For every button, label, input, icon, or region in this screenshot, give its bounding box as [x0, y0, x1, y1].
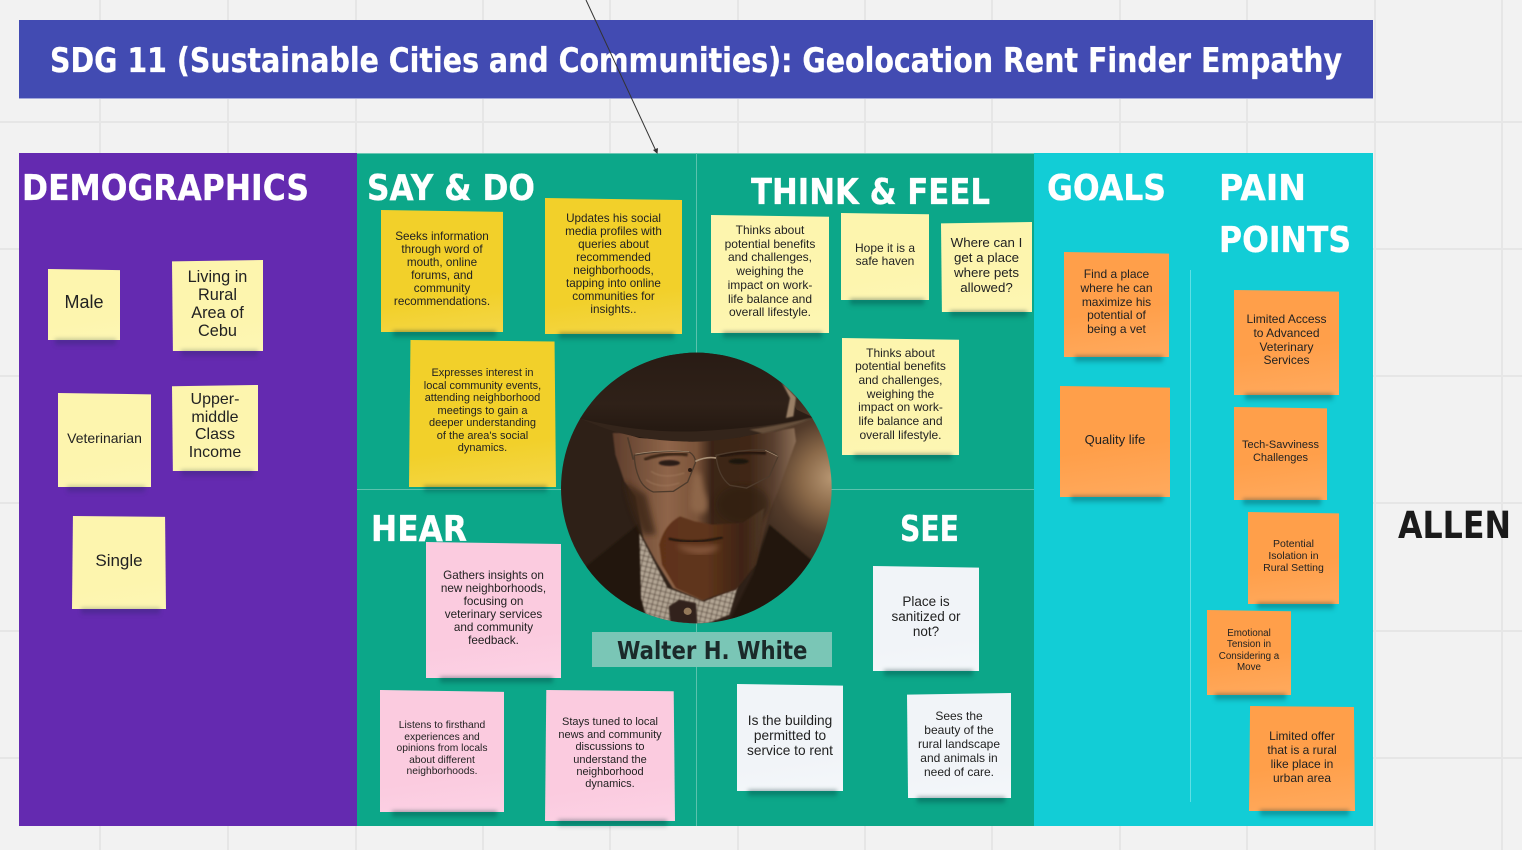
note: benefits and challenges one	[711, 215, 829, 333]
note: sanitized: Place is	[902, 594, 950, 609]
heading: pain points	[1219, 168, 1351, 261]
note: benefits and challenges two: impact on work-	[858, 400, 943, 414]
heading: goals: GOALS	[1047, 168, 1166, 209]
note: living in rural area: Living in	[188, 268, 247, 286]
note: sanitized: not?	[913, 624, 939, 639]
note: benefits and challenges one: weighing the	[736, 264, 804, 278]
note: find a place: where he can	[1080, 281, 1153, 295]
tie knot	[669, 600, 698, 628]
note: local news: understand the	[573, 754, 647, 766]
note: listens: neighborhoods.	[406, 766, 478, 777]
note: pets allowed: where pets	[954, 265, 1019, 280]
note: benefits and challenges two: potential benefits	[855, 359, 946, 373]
panel: goals and pain points	[1034, 153, 1373, 826]
panel: empathy quadrants	[357, 153, 1034, 826]
note: building permit	[737, 684, 843, 791]
note: benefits and challenges two: life balance and	[858, 414, 943, 428]
note: income class: Class	[195, 426, 235, 443]
note: quality life: Quality life	[1085, 432, 1145, 447]
nose	[690, 473, 707, 513]
note: community events: attending neighborhood	[425, 392, 540, 404]
note: living in rural area: Rural	[198, 286, 237, 304]
note: seeks information: forums, and	[411, 269, 473, 282]
note: living in rural area: Cebu	[198, 322, 237, 340]
note: seeks information: Seeks information	[395, 230, 489, 243]
note: isolation: Isolation in	[1268, 550, 1319, 562]
note: emotional tension	[1207, 610, 1291, 695]
note: income class: Income	[189, 444, 241, 460]
glasses	[634, 450, 778, 492]
note: benefits and challenges two	[842, 338, 959, 455]
note: tech savviness: Tech-Savviness	[1242, 438, 1319, 450]
note: find a place: being a vet	[1087, 322, 1146, 336]
note: single: Single	[95, 550, 143, 570]
note: veterinary access: to Advanced	[1253, 326, 1320, 340]
note: community events: meetings to gain a	[438, 405, 527, 417]
note: updates profiles: Updates his social	[566, 212, 661, 225]
note: sanitized	[873, 566, 979, 671]
note: emotional tension: Emotional	[1227, 628, 1271, 638]
note: rural beauty: Sees the	[935, 708, 983, 722]
note: updates profiles: queries about	[578, 238, 649, 251]
note: income class: middle	[191, 408, 239, 426]
note: find a place: potential of	[1087, 308, 1146, 322]
note: updates profiles: tapping into online	[566, 277, 661, 290]
note: pets allowed: Where can I	[951, 235, 1022, 250]
title banner background	[19, 20, 1373, 98]
note: benefits and challenges one: impact on work-	[728, 278, 812, 292]
note: seeks information: community	[414, 282, 470, 295]
note: benefits and challenges two: Thinks about	[866, 346, 935, 360]
note: benefits and challenges one: potential benefits	[725, 237, 815, 251]
note: seeks information: recommendations.	[394, 295, 490, 308]
note: updates profiles	[545, 198, 682, 334]
note: living in rural area	[172, 260, 263, 351]
note: isolation: Potential	[1273, 538, 1314, 550]
note: benefits and challenges two: overall lifestyle.	[859, 428, 942, 442]
note: gathers insights: Gathers insights on	[443, 569, 544, 582]
note: updates profiles: media profiles with	[565, 225, 662, 238]
note: pets allowed	[941, 222, 1032, 312]
note: rural beauty: rural landscape	[918, 736, 1000, 750]
note: gathers insights: and community	[454, 621, 533, 634]
note: income class	[172, 385, 258, 471]
panel: demographics	[19, 153, 357, 826]
note: rural beauty: and animals in	[920, 750, 998, 764]
heading: pain points: PAIN	[1219, 168, 1306, 209]
note: limited offer: like place in	[1271, 756, 1333, 770]
note: gathers insights: focusing on	[464, 595, 523, 608]
note: seeks information: mouth, online	[407, 256, 477, 269]
note: rural beauty	[907, 693, 1011, 798]
note: emotional tension: Tension in	[1227, 639, 1271, 650]
arrow	[586, 0, 658, 154]
note: isolation: Rural Setting	[1263, 562, 1324, 574]
note: sanitized: sanitized or	[891, 609, 961, 624]
note: community events: local community events,	[424, 380, 541, 392]
name label: Walter H. White	[617, 636, 807, 665]
note: local news: news and community	[558, 729, 662, 741]
hat	[580, 348, 813, 442]
portrait photo	[561, 352, 832, 624]
note: updates profiles: communities for	[572, 290, 655, 303]
note: local news: dynamics.	[585, 778, 635, 790]
note: local news	[545, 690, 675, 821]
note: veterinary access: Limited Access	[1246, 312, 1327, 326]
note: building permit: service to rent	[747, 743, 833, 758]
note: limited offer: Limited offer	[1269, 728, 1335, 742]
note: safe haven	[841, 213, 929, 300]
note: community events: dynamics.	[458, 442, 507, 454]
note: find a place	[1064, 252, 1169, 357]
note: limited offer: urban area	[1273, 770, 1331, 784]
heading: pain points: POINTS	[1219, 220, 1351, 261]
note: safe haven: safe haven	[856, 254, 914, 268]
coat	[586, 524, 812, 619]
note: building permit: permitted to	[754, 728, 826, 743]
note: seeks information: through word of	[401, 243, 483, 256]
note: benefits and challenges two: weighing the	[867, 387, 934, 401]
note: listens	[380, 690, 504, 812]
note: rural beauty: beauty of the	[924, 722, 994, 736]
heading: see: SEE	[900, 509, 959, 550]
note: community events: deeper understanding	[429, 417, 536, 429]
name label	[592, 632, 832, 667]
note: local news: neighborhood	[576, 766, 644, 778]
note: community events: Expresses interest in	[431, 367, 534, 379]
note: building permit: Is the building	[748, 713, 832, 728]
note: benefits and challenges one: Thinks about	[736, 223, 804, 237]
note: benefits and challenges one: life balance and	[728, 292, 812, 306]
note: listens: about different	[409, 755, 475, 766]
note: gathers insights: veterinary services	[445, 608, 542, 621]
note: limited offer	[1249, 706, 1355, 811]
note: benefits and challenges one: overall lifestyle.	[729, 305, 811, 319]
note: veterinary access: Services	[1263, 353, 1310, 367]
note: local news: Stays tuned to local	[562, 716, 658, 728]
shirt collar	[639, 533, 738, 628]
note: updates profiles: neighborhoods,	[573, 264, 654, 277]
note: find a place: Find a place	[1084, 267, 1149, 281]
note: veterinary access	[1234, 290, 1339, 395]
note: benefits and challenges one: and challenges,	[728, 250, 812, 264]
note: gathers insights: feedback.	[468, 634, 519, 647]
beard	[659, 508, 764, 600]
note: benefits and challenges two: and challenges,	[858, 373, 943, 387]
note: community events	[409, 340, 556, 487]
note: male: Male	[64, 292, 104, 312]
note: emotional tension: Move	[1237, 662, 1261, 673]
note: income class: Upper-	[191, 391, 239, 408]
face	[613, 428, 796, 601]
heading: think and feel: THINK & FEEL	[751, 172, 990, 213]
note: isolation	[1248, 512, 1339, 604]
note: gathers insights: new neighborhoods,	[441, 582, 546, 595]
note: emotional tension: Considering a	[1219, 650, 1279, 662]
note: seeks information	[381, 210, 503, 332]
note: listens: Listens to firsthand	[399, 720, 485, 731]
heading: hear: HEAR	[371, 509, 467, 550]
note: listens: opinions from locals	[396, 743, 488, 754]
note: living in rural area: Area of	[191, 304, 244, 322]
note: community events: of the area's social	[437, 430, 528, 442]
note: find a place: maximize his	[1082, 295, 1151, 309]
note: tech savviness: Challenges	[1253, 452, 1308, 464]
note: pets allowed: allowed?	[960, 280, 1013, 295]
note: limited offer: that is a rural	[1267, 742, 1337, 756]
note: rural beauty: need of care.	[924, 764, 994, 778]
note: safe haven: Hope it is a	[855, 240, 915, 254]
note: tech savviness	[1234, 407, 1327, 500]
note: veterinary access: Veterinary	[1259, 340, 1314, 354]
note: veterinarian: Veterinarian	[67, 430, 142, 446]
note: local news: discussions to	[575, 741, 645, 753]
heading: demographics: DEMOGRAPHICS	[22, 168, 309, 209]
note: pets allowed: get a place	[954, 250, 1019, 265]
note: updates profiles: insights..	[590, 303, 637, 316]
note: gathers insights	[426, 542, 561, 678]
note: updates profiles: recommended	[576, 251, 651, 264]
heading: say and do: SAY & DO	[367, 168, 535, 209]
eyes and brows	[644, 454, 688, 460]
note: listens: experiences and	[404, 732, 480, 743]
